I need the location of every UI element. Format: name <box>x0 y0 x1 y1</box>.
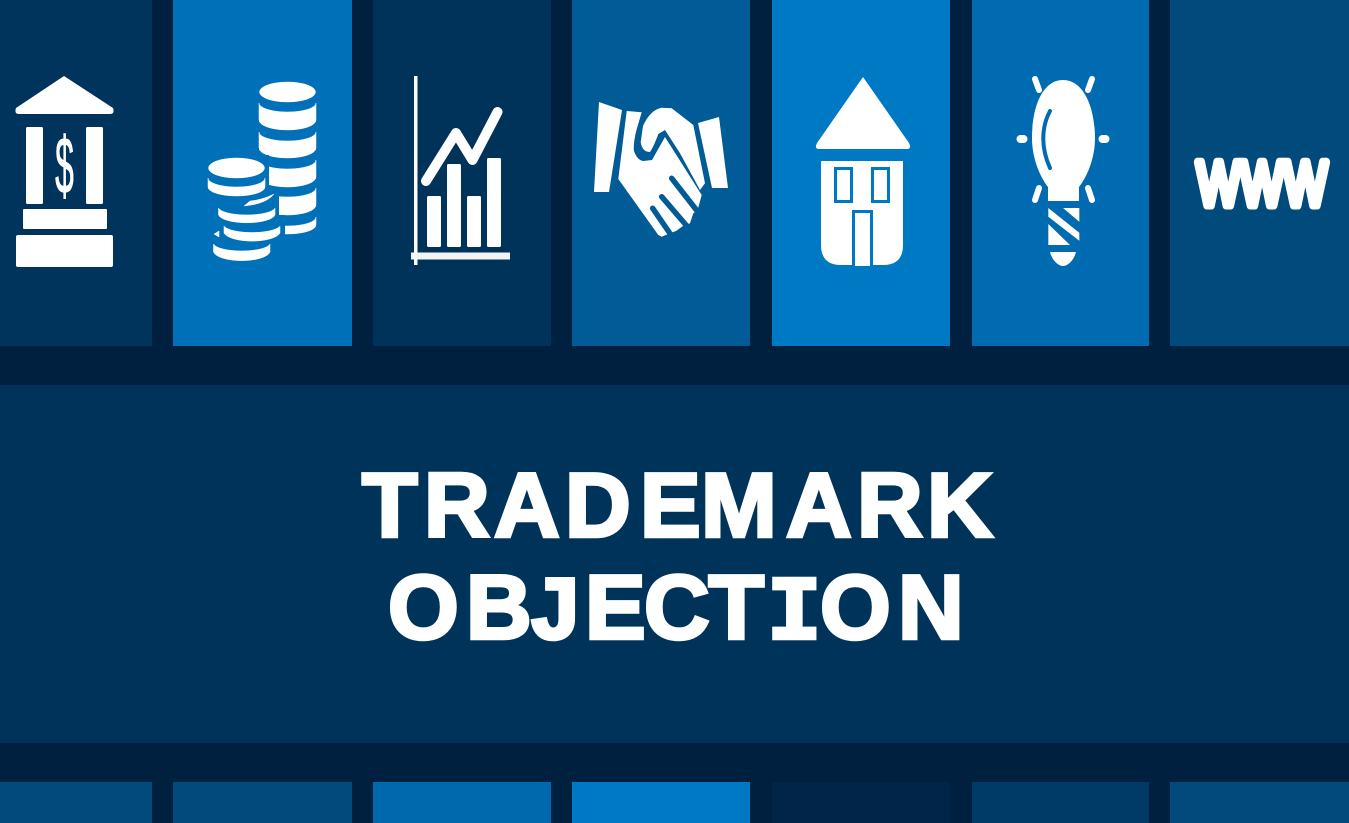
title: OB <box>388 558 532 658</box>
panel: light bulb tile <box>972 0 1149 346</box>
icon: bank <box>15 76 114 267</box>
panel: www tile <box>1170 0 1349 346</box>
panel: bank tile <box>0 0 152 346</box>
panel: handshake tile <box>572 0 750 346</box>
panel: coins tile <box>173 0 352 346</box>
panel: chart tile <box>373 0 551 346</box>
title: TRADEMARK <box>362 456 993 556</box>
title: J <box>528 564 583 666</box>
icon: growth chart <box>411 76 510 265</box>
icon: light bulb <box>1020 79 1106 266</box>
icon: house <box>816 77 910 266</box>
title: I <box>767 564 822 666</box>
panel: house tile <box>772 0 950 346</box>
title <box>362 456 993 666</box>
panel: title banner <box>0 385 1349 743</box>
icon: handshake <box>594 102 728 237</box>
title: ECT <box>585 558 764 658</box>
icon: bank: $ <box>55 121 74 211</box>
icon: coin stacks <box>208 82 316 261</box>
bottom tile row <box>0 782 1349 823</box>
title: ON <box>820 558 964 658</box>
